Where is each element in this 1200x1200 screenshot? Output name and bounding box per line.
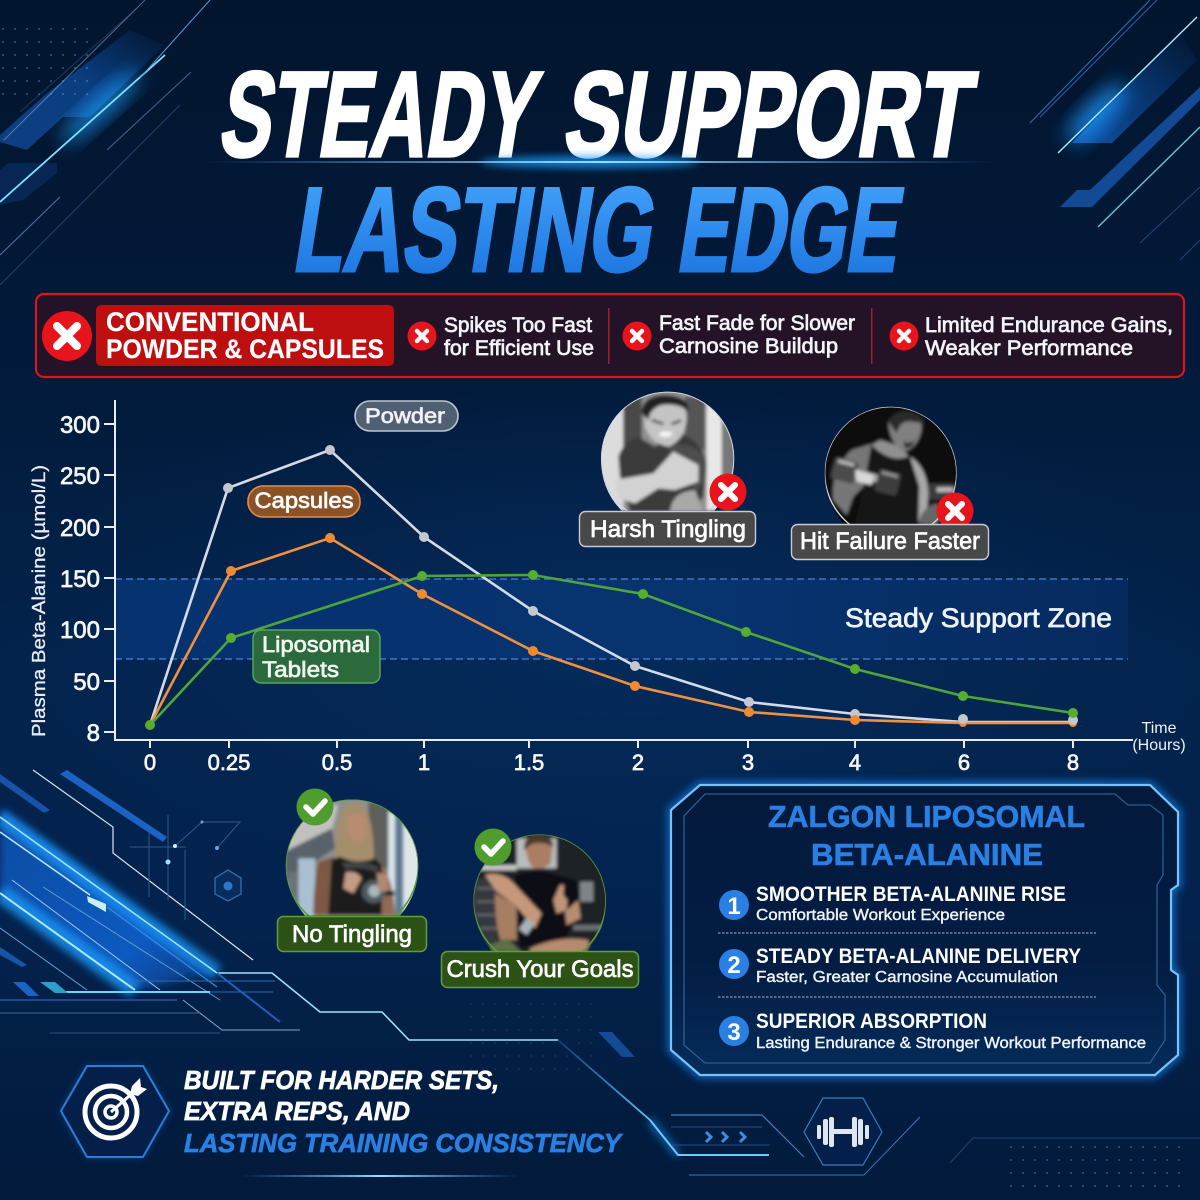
item: limited endurance: Limited Endurance Gains, bbox=[925, 314, 1173, 337]
closing statement: EXTRA REPS, AND bbox=[184, 1096, 410, 1126]
label: hit failure faster: Hit Failure Faster bbox=[800, 528, 980, 555]
line: liposomal tablets bbox=[145, 570, 1078, 730]
title: STEADY SUPPORT: SUPPORT bbox=[557, 47, 983, 182]
panel heading bbox=[768, 799, 1085, 872]
icon: check badge bbox=[296, 788, 334, 826]
label: capsules: Capsules bbox=[254, 488, 354, 513]
y axis labels: 200 bbox=[60, 515, 100, 542]
icon: large red x bbox=[42, 311, 92, 361]
decoration: top-left diagonal light streaks bbox=[0, 0, 210, 285]
label: harsh tingling: Harsh Tingling bbox=[590, 516, 746, 543]
decoration: bottom glow line bbox=[240, 1175, 520, 1177]
label: powder bbox=[355, 401, 458, 431]
x axis labels: 1.5 bbox=[514, 750, 544, 775]
benefit 1: Comfortable Workout Experience bbox=[756, 907, 1005, 924]
item: spikes too fast bbox=[408, 314, 594, 360]
icon: x badge bbox=[710, 474, 746, 510]
y axis labels: 50 bbox=[73, 669, 100, 696]
y axis labels bbox=[60, 412, 100, 747]
photo: woman with kettlebell bbox=[286, 799, 418, 916]
icon: dumbbell in hexagon bbox=[804, 1098, 882, 1165]
heading: conventional powder and capsules bbox=[96, 305, 394, 366]
y axis labels: 100 bbox=[60, 617, 100, 644]
photo: man holding shoulder bbox=[601, 392, 734, 511]
panel heading: ZALGON LIPOSOMAL bbox=[768, 799, 1085, 834]
title: STEADY SUPPORT bbox=[213, 47, 983, 182]
x axis labels: 0.25 bbox=[208, 750, 250, 775]
y axis title: Plasma Beta-Alanine (µmol/L) bbox=[29, 465, 49, 737]
axes bbox=[104, 400, 1133, 748]
icon: check badge bbox=[474, 828, 512, 866]
benefit 1 bbox=[719, 883, 1066, 924]
photo: seated man thumbs up bbox=[473, 834, 606, 951]
y axis labels: 250 bbox=[60, 463, 100, 490]
icon: target in hexagon bbox=[61, 1066, 169, 1157]
photo callout: harsh tingling bbox=[580, 390, 756, 546]
title: LASTING EDGE: LASTING bbox=[287, 163, 666, 297]
photo: man curling dumbbell bbox=[824, 406, 957, 524]
heading: conventional powder and capsules: POWDER & CAPSULES bbox=[106, 334, 384, 364]
icon: small hex node bbox=[215, 870, 241, 901]
x axis labels: 6 bbox=[958, 750, 970, 775]
benefit 2: Faster, Greater Carnosine Accumulation bbox=[756, 969, 1058, 986]
benefit 3: SUPERIOR ABSORPTION bbox=[756, 1010, 987, 1033]
closing statement: BUILT FOR HARDER SETS, bbox=[184, 1065, 499, 1095]
label: liposomal tablets bbox=[253, 630, 380, 683]
benefit 3 bbox=[719, 1010, 1146, 1052]
decoration: top-right diagonal light streaks bbox=[1030, 0, 1200, 260]
chart: plasma beta-alanine over time bbox=[29, 400, 1186, 775]
closing statement bbox=[184, 1065, 624, 1158]
label: crush your goals: Crush Your Goals bbox=[446, 956, 634, 983]
closing statement: LASTING TRAINING CONSISTENCY bbox=[184, 1128, 624, 1158]
x axis labels bbox=[144, 750, 1079, 775]
item: fast fade bbox=[622, 312, 855, 358]
photo callout: hit failure faster bbox=[792, 400, 988, 560]
x axis labels: 2 bbox=[632, 750, 644, 775]
line: powder bbox=[150, 445, 1073, 725]
label: no tingling: No Tingling bbox=[292, 921, 412, 948]
panel: zalgon liposomal beta-alanine bbox=[671, 785, 1178, 1075]
benefit 2: STEADY BETA-ALANINE DELIVERY bbox=[756, 945, 1081, 968]
x axis labels: 4 bbox=[849, 750, 861, 775]
label: liposomal tablets: Liposomal bbox=[262, 632, 370, 657]
benefit 3: 3 bbox=[727, 1019, 741, 1046]
benefit 1: SMOOTHER BETA-ALANINE RISE bbox=[756, 883, 1066, 906]
icon: x badge bbox=[936, 492, 974, 530]
label: harsh tingling bbox=[580, 512, 756, 546]
steady support zone band: Steady Support Zone bbox=[845, 603, 1112, 633]
panel: conventional powder and capsules bbox=[36, 294, 1184, 377]
item: fast fade: Carnosine Buildup bbox=[659, 335, 838, 358]
item: limited endurance bbox=[890, 314, 1173, 360]
item: spikes too fast: Spikes Too Fast bbox=[444, 314, 592, 337]
photo callout: no tingling bbox=[278, 788, 426, 952]
photo callout: crush your goals bbox=[442, 828, 638, 988]
decoration: bottom-left circuit lines bbox=[0, 770, 558, 1040]
benefit 2 bbox=[719, 945, 1081, 986]
label: capsules bbox=[248, 486, 360, 517]
panel heading: BETA-ALANINE bbox=[811, 837, 1043, 872]
label: liposomal tablets: Tablets bbox=[262, 657, 339, 682]
heading: conventional powder and capsules: CONVENTIONAL bbox=[106, 307, 314, 337]
x axis labels: 0 bbox=[144, 750, 156, 775]
item: spikes too fast: for Efficient Use bbox=[444, 337, 594, 360]
x axis labels: 3 bbox=[742, 750, 754, 775]
label: powder: Powder bbox=[365, 405, 445, 428]
y axis labels: 300 bbox=[60, 412, 100, 439]
benefit 2: 2 bbox=[727, 952, 741, 979]
x axis labels: 0.5 bbox=[322, 750, 352, 775]
steady support zone band bbox=[115, 579, 1128, 659]
panel frame bbox=[671, 785, 1178, 1075]
benefit 1: 1 bbox=[727, 893, 741, 920]
x axis labels: 8 bbox=[1067, 750, 1079, 775]
decoration: bottom-right circuit lines bbox=[470, 1000, 1200, 1195]
x axis title bbox=[1132, 720, 1186, 754]
x axis labels: 1 bbox=[418, 750, 430, 775]
line: capsules bbox=[150, 533, 1078, 727]
icon: chevrons bbox=[706, 1132, 745, 1142]
x axis title: Time bbox=[1142, 720, 1177, 737]
title: LASTING EDGE: EDGE bbox=[671, 163, 912, 297]
item: limited endurance: Weaker Performance bbox=[925, 337, 1133, 360]
y axis labels: 8 bbox=[87, 720, 100, 747]
item: fast fade: Fast Fade for Slower bbox=[659, 312, 855, 335]
y axis labels: 150 bbox=[60, 566, 100, 593]
x axis title: (Hours) bbox=[1132, 737, 1186, 754]
title: STEADY SUPPORT: STEADY bbox=[213, 47, 548, 182]
benefit 3: Lasting Endurance & Stronger Workout Performance bbox=[756, 1035, 1146, 1052]
title divider glow bbox=[200, 156, 1000, 168]
label: no tingling bbox=[278, 916, 426, 952]
